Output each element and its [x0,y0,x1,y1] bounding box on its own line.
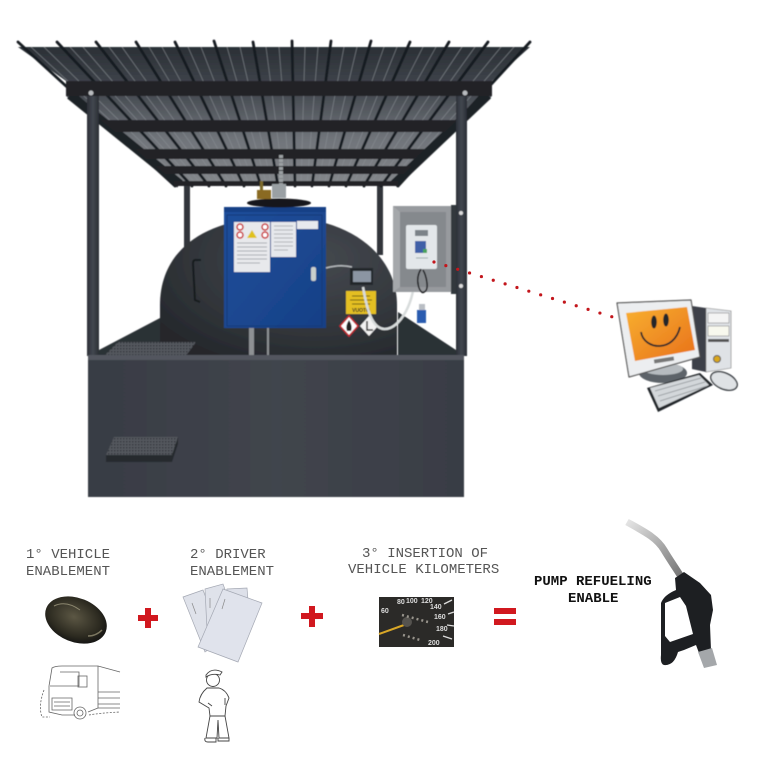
driver cards [183,584,262,662]
fold-down step [106,437,178,462]
step 3 heading: 3° INSERTION OF [362,546,488,562]
fuel hose [363,274,414,329]
step 1: vehicle enablement [26,547,120,719]
black cable [418,269,427,292]
odometer photo: 140 [430,604,442,611]
red dotted data link [434,262,616,318]
step 2: driver enablement [183,547,274,742]
driver sketch [199,670,229,742]
step 2 heading: 2° DRIVER [190,547,266,563]
result heading: PUMP REFUELING [534,574,652,590]
roof side rails [70,95,488,184]
safety sticker [234,222,270,272]
step 2 heading: ENABLEMENT [190,564,274,580]
instruction sticker [271,222,296,257]
speedometer needle [379,625,404,634]
blue plug [417,304,426,323]
truck sketch [40,666,120,719]
mouse [708,368,740,394]
desktop computer [617,300,740,412]
nozzle tip [698,648,717,668]
odometer photo: 160 [434,614,446,621]
equals sign [494,608,516,625]
odometer digits [402,615,428,640]
terminal housing [393,205,463,323]
smile [641,327,680,346]
needle hub [402,617,412,627]
door latch [311,267,316,281]
nozzle spout [627,522,680,575]
hazard diamond: environment [360,316,378,336]
roof ribs [18,41,530,186]
odometer photo: 80 [397,599,405,606]
bracket bolts [459,211,463,288]
gauge ticks [443,600,454,639]
hazard diamond: flammable [340,316,358,336]
computer tower [692,306,731,372]
roof [18,41,530,186]
keypad terminal [406,225,437,269]
tank top fittings [247,155,311,208]
roof cross beams [66,81,492,186]
monitor badge [654,356,674,364]
plus sign 2 [301,606,323,627]
step 1 heading: ENABLEMENT [26,564,110,580]
walkway grating [103,342,196,357]
step 3: vehicle kilometers [348,546,499,647]
vehicle key tag [38,588,114,652]
odometer photo: 200 [428,640,440,647]
keyboard [647,373,713,412]
roof sheet [18,47,530,186]
fuel tank station [18,41,530,497]
odometer photo: 120 [421,598,433,605]
result: pump refueling enable [534,522,717,668]
monitor stand [639,363,687,383]
odometer photo [379,597,454,647]
step 3 heading: VEHICLE KILOMETERS [348,562,499,578]
step 1 heading: 1° VEHICLE [26,547,110,563]
odometer photo: 60 [381,608,389,615]
tank body [160,217,397,357]
front posts [87,96,467,356]
tank conduit and meter [326,266,373,285]
roof corrugations [31,47,514,186]
nozzle body [661,572,713,665]
beam bolts [88,90,468,96]
monitor [617,300,700,377]
smiley eyes [651,314,669,328]
logo plate [297,221,318,229]
blue cabinet [224,207,326,328]
fuel nozzle [627,522,717,668]
result heading: ENABLE [568,591,618,607]
odometer photo: 180 [436,626,448,633]
yellow warning sign: VUOTO [352,308,370,314]
containment inner walls [99,312,456,358]
odometer photo: 100 [406,598,418,605]
yellow warning sign [346,291,376,314]
plus sign 1 [138,608,158,628]
containment base [88,355,464,497]
tank handle [193,260,201,302]
rear posts [184,183,383,255]
cabinet pipes [249,328,269,357]
